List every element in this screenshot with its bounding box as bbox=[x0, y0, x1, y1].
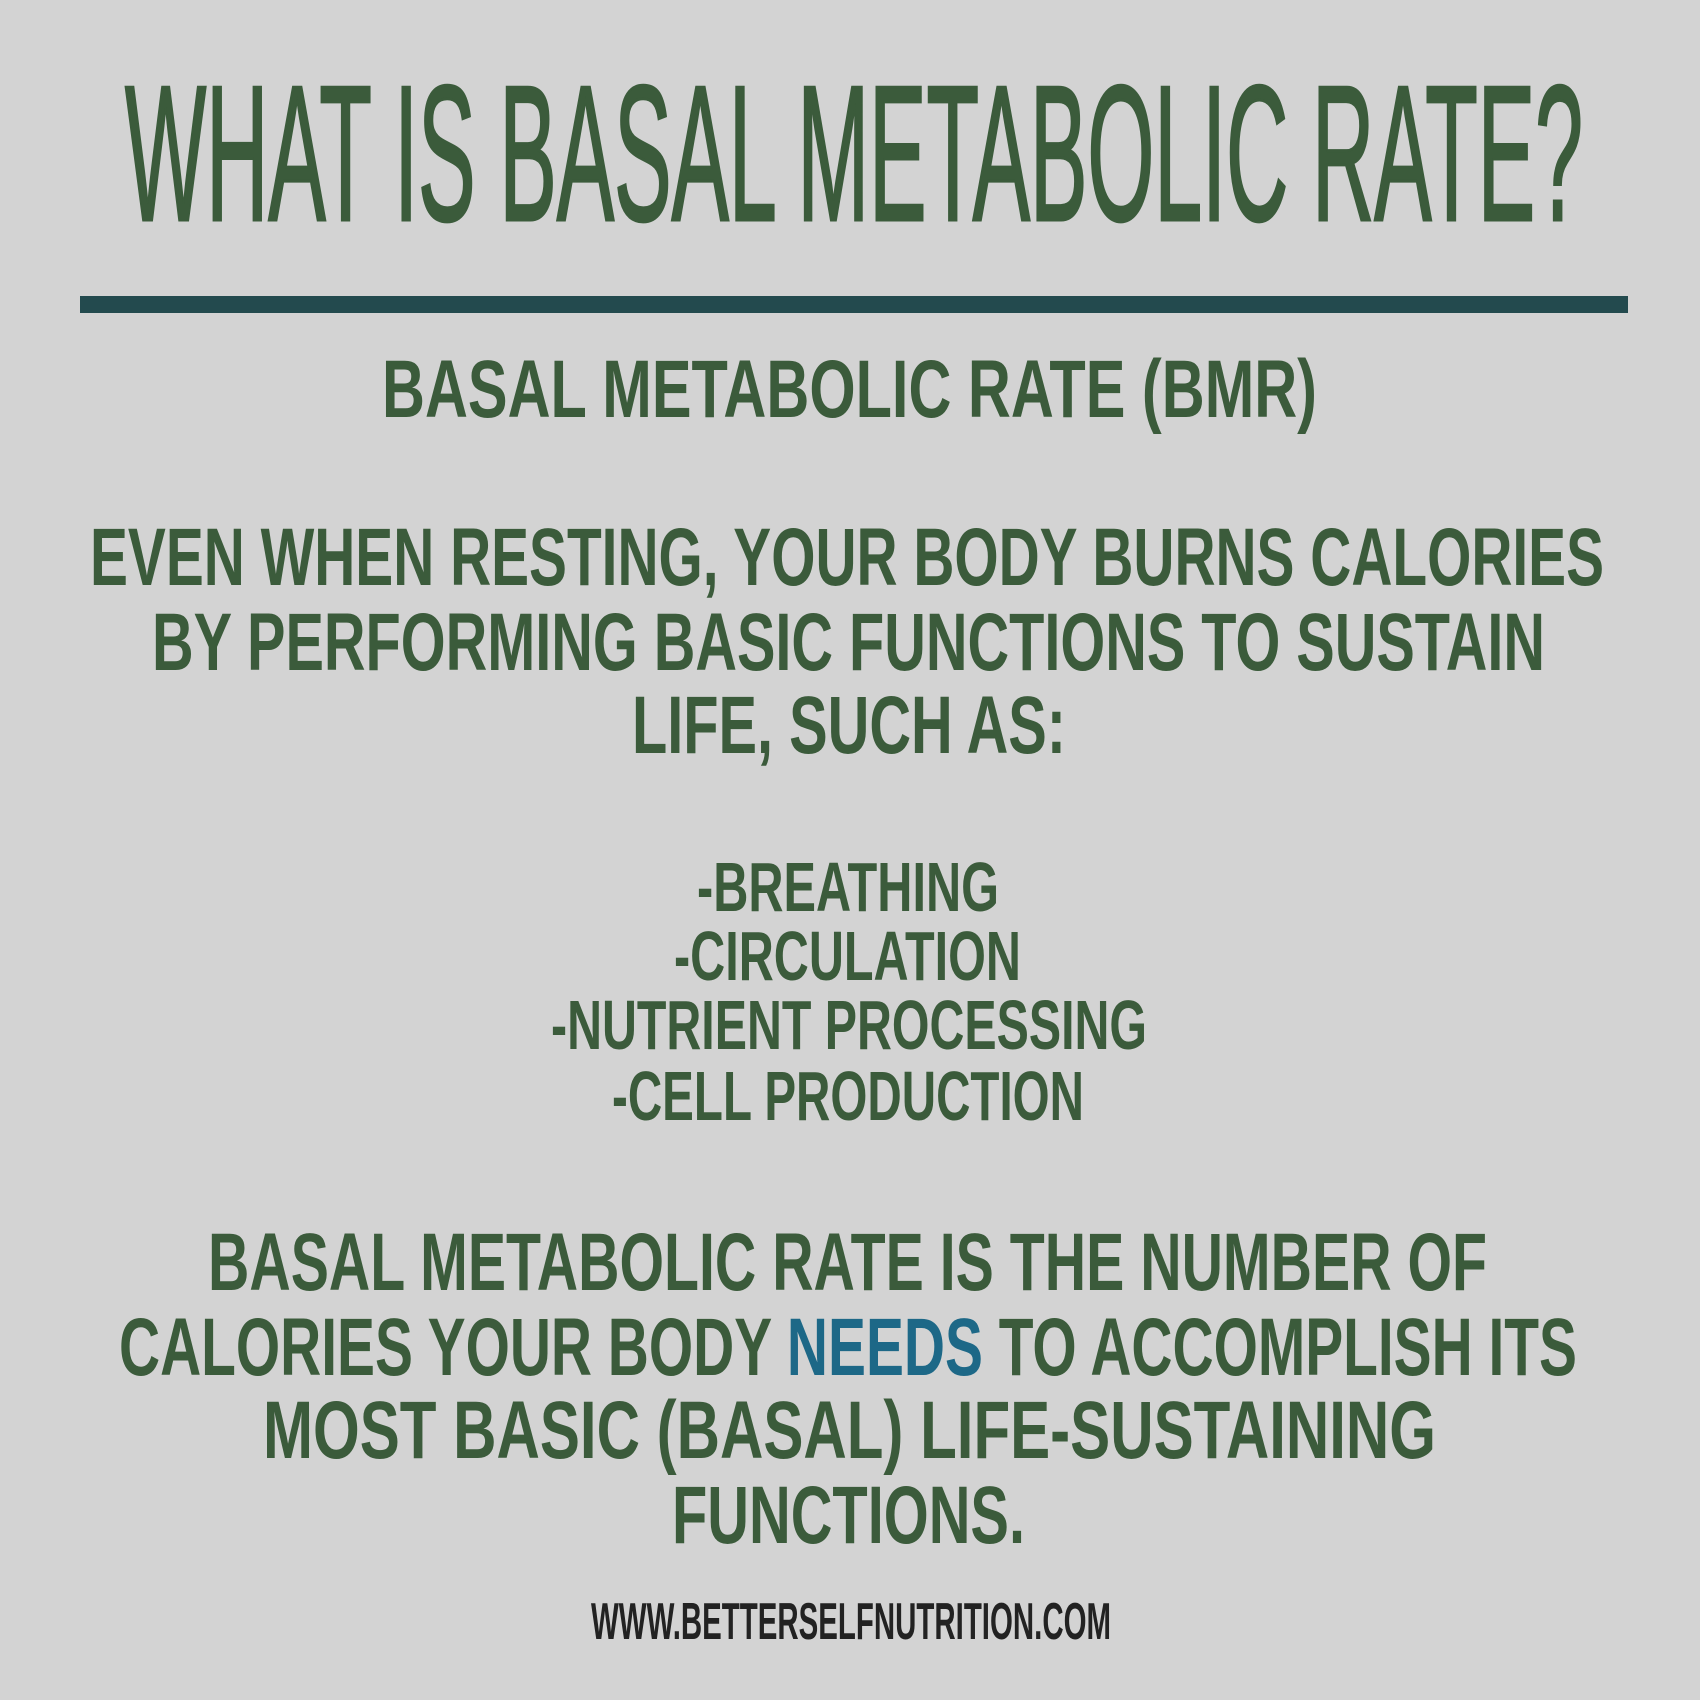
intro paragraph bbox=[90, 512, 1604, 771]
function list: -BREATHING bbox=[697, 848, 999, 926]
intro paragraph: LIFE, SUCH AS: bbox=[632, 680, 1066, 771]
function list: -CIRCULATION bbox=[674, 917, 1021, 995]
subtitle: BASAL METABOLIC RATE (BMR) bbox=[382, 344, 1317, 435]
definition paragraph: FUNCTIONS. bbox=[672, 1470, 1025, 1561]
function list bbox=[551, 848, 1147, 1135]
website url: WWW.BETTERSELFNUTRITION.COM bbox=[591, 1593, 1111, 1651]
divider rule bbox=[80, 296, 1628, 313]
function list: -CELL PRODUCTION bbox=[612, 1057, 1084, 1135]
definition paragraph bbox=[119, 1217, 1577, 1561]
function list: -NUTRIENT PROCESSING bbox=[551, 986, 1147, 1064]
